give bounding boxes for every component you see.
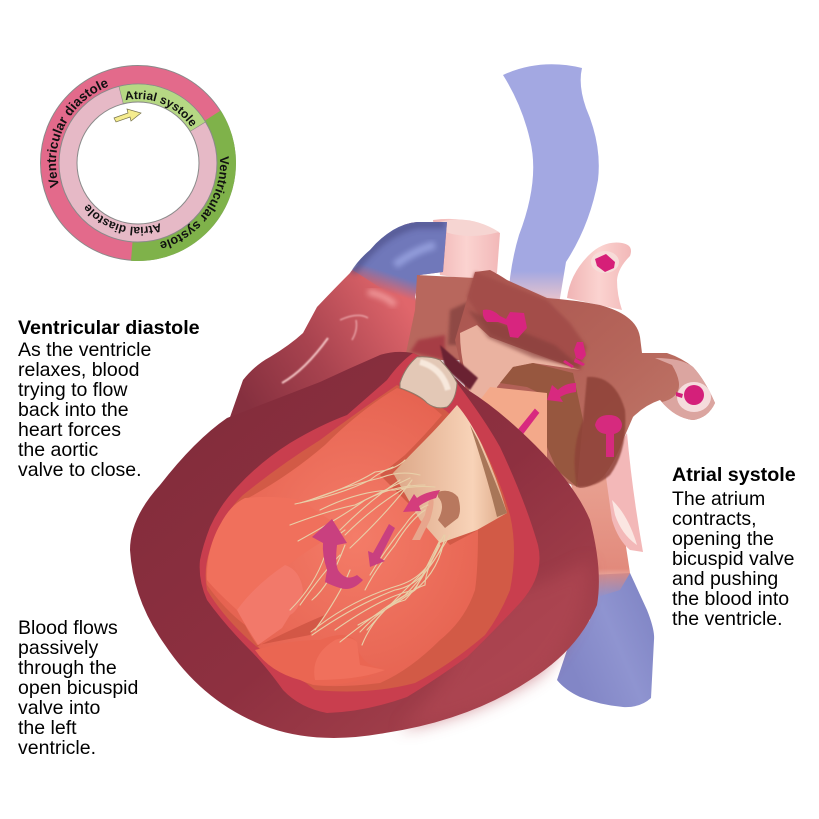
label: atrial systole: Atrial systole bbox=[126, 90, 196, 126]
cycle diagram: cardiac cycle ring bbox=[40, 65, 236, 261]
body: heart forces bbox=[18, 419, 121, 441]
text block: passive flow: open bicuspid bbox=[18, 677, 138, 699]
heading: Atrial systole bbox=[672, 464, 796, 486]
ventricle: tan atrial wall bbox=[393, 405, 507, 543]
ventricle: cut wall band bbox=[200, 353, 540, 713]
body: contracts, bbox=[672, 508, 757, 530]
vessel: superior vein bbox=[503, 64, 599, 310]
ventricle: papillary muscle lower bbox=[255, 635, 380, 685]
label: atrial diastole: Atrial diastole bbox=[84, 204, 160, 236]
chordae tendineae bbox=[290, 460, 450, 645]
vessel: inferior vein bbox=[557, 573, 654, 707]
arrow: blood passing bicuspid valve bbox=[518, 410, 538, 434]
body: and pushing bbox=[672, 568, 778, 590]
body: bicuspid valve bbox=[672, 548, 794, 570]
text block: passive flow: valve into bbox=[18, 697, 101, 719]
ventricle: outer shell bbox=[130, 352, 599, 738]
vessel tip: blue aortic segment bbox=[352, 222, 447, 300]
vessel: aorta pale trunk bbox=[433, 219, 500, 280]
body: The atrium bbox=[672, 488, 765, 510]
vessel: aortic arch bbox=[230, 222, 447, 417]
valve: aortic valve cusps bbox=[400, 357, 457, 408]
outer segment: ventricular systole bbox=[131, 110, 236, 261]
chamber: left atrium bbox=[455, 270, 715, 488]
chamber: dark upper tube bbox=[467, 272, 587, 370]
vessel: pulmonary vein, lower pale flap bbox=[605, 433, 643, 552]
chamber: pale atrial lobe bbox=[460, 325, 580, 405]
label: ventricular systole: Ventricular systole bbox=[160, 156, 229, 248]
chamber: orange atrial floor bbox=[480, 387, 547, 470]
ventricle: cavity bbox=[206, 388, 478, 686]
ventricle: inner wall bbox=[206, 385, 514, 691]
text block: passive flow: Blood flows bbox=[18, 617, 118, 639]
arrow: blood from pulmonary vein, top left bbox=[483, 310, 527, 338]
body: trying to flow bbox=[18, 379, 128, 401]
chamber: brown atrial wall bbox=[500, 363, 583, 487]
body: back into the bbox=[18, 399, 129, 421]
body: the blood into bbox=[672, 588, 789, 610]
label: ventricular diastole: Ventricular diastole bbox=[47, 80, 108, 188]
arrow: blood entering upper vein bbox=[595, 254, 615, 272]
heading: Ventricular diastole bbox=[18, 317, 200, 339]
text block: passive flow: through the bbox=[18, 657, 117, 679]
text block: ventricular diastole bbox=[18, 317, 200, 481]
chamber: lower lobe bbox=[575, 377, 625, 487]
text block: atrial systole bbox=[672, 464, 796, 630]
icon: position arrow bbox=[114, 109, 141, 122]
arrow: curved flow at apex bbox=[312, 519, 363, 589]
body: opening the bbox=[672, 528, 774, 550]
arrow: blood from right pulmonary vein bbox=[676, 385, 704, 405]
valve: tan valve flap bbox=[438, 491, 460, 528]
body: valve to close. bbox=[18, 459, 142, 481]
arrow: blood from pulmonary vein, centre bbox=[563, 342, 586, 368]
body: the aortic bbox=[18, 439, 98, 461]
ventricle: papillary muscle left bbox=[207, 497, 330, 610]
chamber: atrial outer block bbox=[405, 275, 478, 360]
text block: passive flow: the left bbox=[18, 717, 77, 739]
illustration: heart cross-section bbox=[130, 64, 715, 738]
text block: passive flow: ventricle. bbox=[18, 737, 96, 759]
arrow: flow at valve opening bbox=[403, 490, 440, 512]
arrow: flow into ventricle bbox=[368, 524, 395, 567]
arrow: blood flow through atrium bbox=[547, 383, 576, 402]
inner segment: atrial systole bbox=[119, 84, 205, 132]
vessel: pulmonary vein, upper branch bbox=[567, 243, 631, 310]
body: relaxes, blood bbox=[18, 359, 139, 381]
text block: passive flow: passively bbox=[18, 637, 98, 659]
arrow: blood from lower pulmonary vein bbox=[595, 415, 622, 457]
vessel: salmon column above inferior vein bbox=[570, 470, 630, 597]
body: the ventricle. bbox=[672, 608, 783, 630]
ventricle: dark wedge behind valve bbox=[440, 345, 478, 390]
body: As the ventricle bbox=[18, 339, 151, 361]
